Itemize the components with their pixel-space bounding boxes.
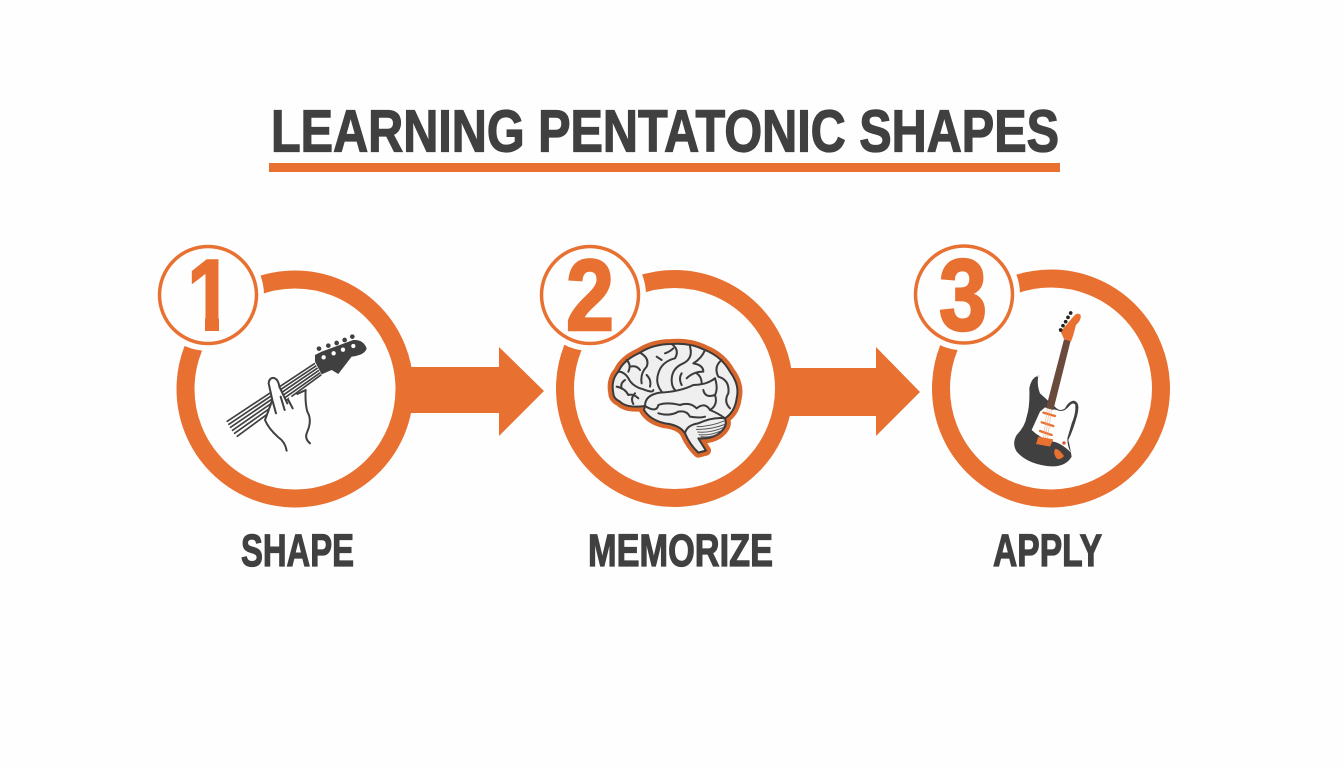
label: shape: SHAPE <box>241 525 354 576</box>
label: memorize: MEMORIZE <box>588 525 773 576</box>
badge 2 <box>534 239 646 352</box>
step 2: memorize <box>534 239 784 576</box>
step 3: apply <box>908 238 1161 576</box>
ring 3 <box>941 278 1161 498</box>
badge 1: 1 <box>187 240 233 352</box>
badge 3 <box>908 238 1020 352</box>
badge 1 <box>158 244 264 350</box>
badge 2: 2 <box>566 240 614 352</box>
label: apply: APPLY <box>993 525 1102 576</box>
title: LEARNING PENTATONIC SHAPES <box>271 98 1059 164</box>
arrow: step 1 to step 2 <box>408 347 544 436</box>
icon: brain <box>613 344 737 453</box>
badge 3: 3 <box>939 240 987 352</box>
icon: electric guitar <box>1014 311 1081 466</box>
icon: hand fretting guitar neck <box>227 334 367 457</box>
step 1: shape <box>152 239 404 576</box>
arrow: step 2 to step 3 <box>788 347 920 436</box>
ring 1 <box>186 280 404 498</box>
ring 2 <box>565 279 784 498</box>
